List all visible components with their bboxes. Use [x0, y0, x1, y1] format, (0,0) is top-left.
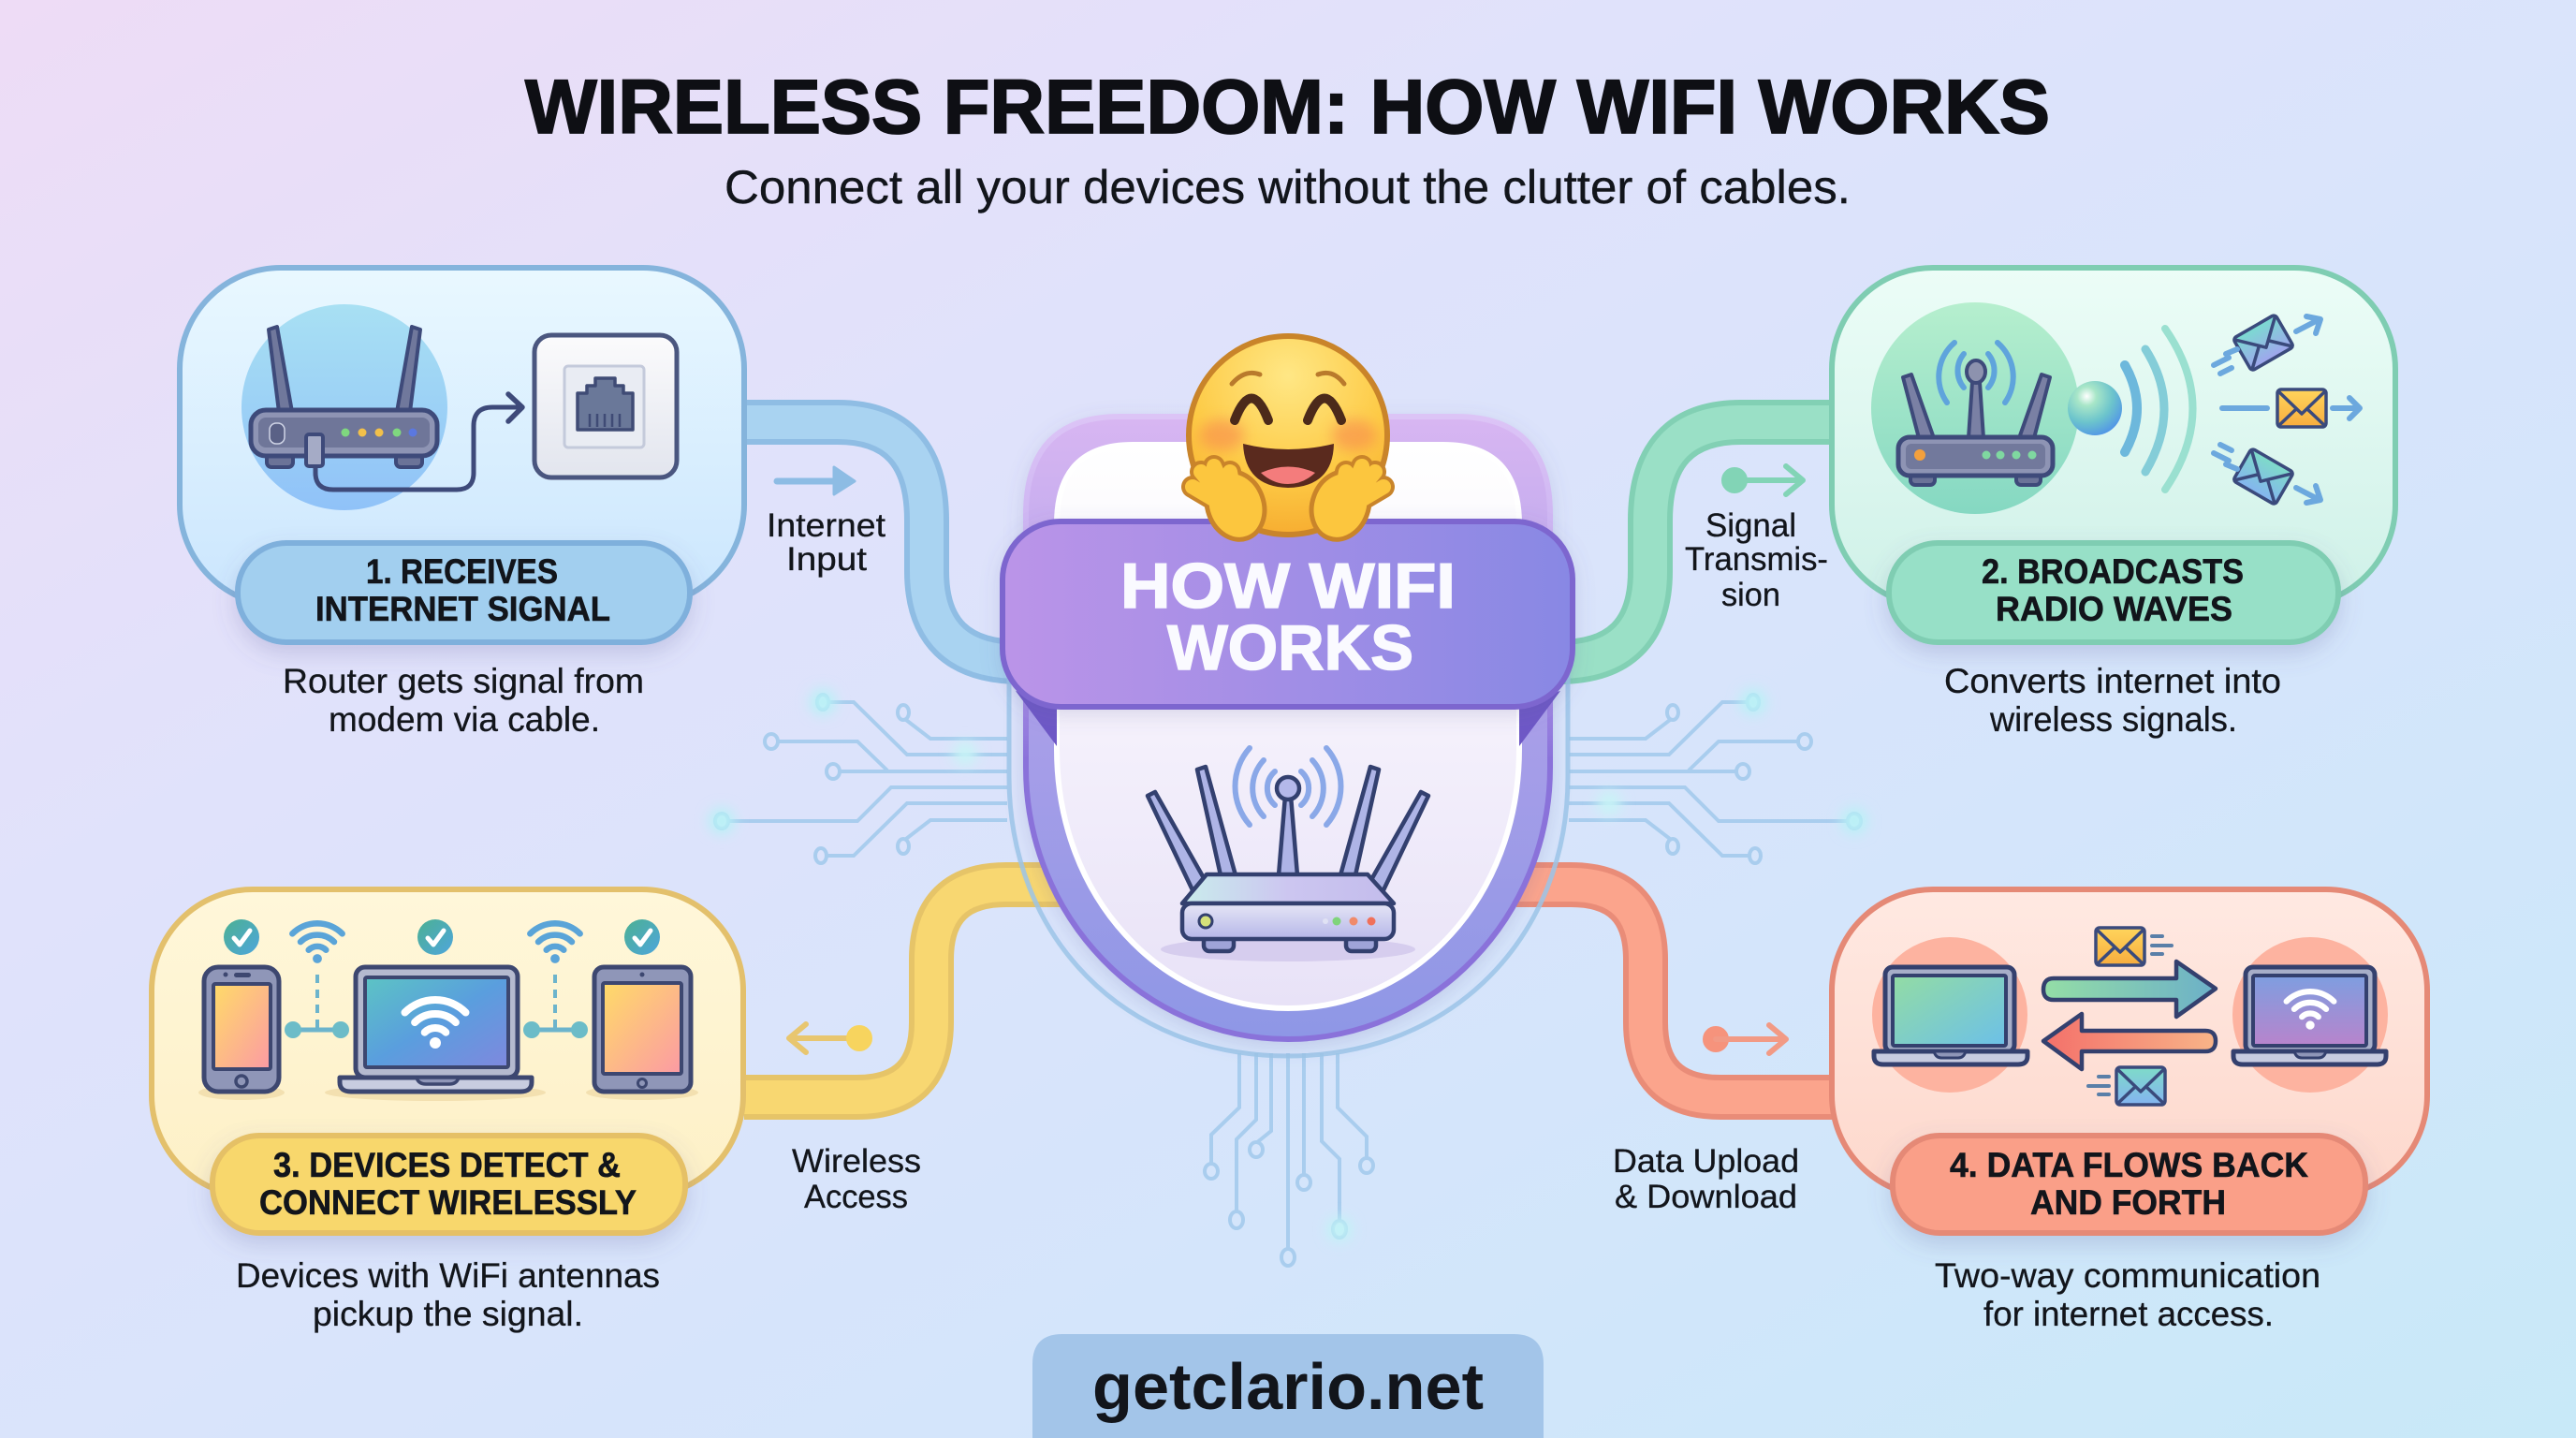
- label: data upload and download: [1613, 1143, 1799, 1215]
- panel 1 title text: 1. RECEIVES: [366, 552, 558, 591]
- icon: glowing signal ball: [2068, 381, 2122, 435]
- icon: laptop with wifi: [340, 967, 532, 1092]
- panel 2 description: Converts internet into: [1944, 662, 2281, 700]
- panel 2 card: [1832, 268, 2395, 606]
- central shield: [1026, 417, 1550, 1039]
- panel 4 title text: [1950, 1146, 2308, 1222]
- label: internet input: Internet: [767, 507, 886, 544]
- label: signal transmission: sion: [1721, 577, 1780, 613]
- label: wireless access: [792, 1143, 921, 1215]
- banner heading: HOW WIFI: [1120, 550, 1456, 622]
- label: data upload and download: & Download: [1615, 1179, 1797, 1215]
- icon: check marks: [224, 919, 660, 955]
- icon: signal circle: [242, 304, 447, 510]
- panel 3 title text: 3. DEVICES DETECT &: [273, 1146, 621, 1184]
- icon: tablet: [594, 967, 691, 1092]
- panel 1: receives internet signal: [180, 268, 744, 739]
- panel 1 card: [180, 268, 744, 606]
- circuit traces: right: [1569, 689, 1867, 863]
- connector: wireless access: [744, 885, 1062, 1097]
- shield inner white area: [1057, 445, 1519, 1008]
- panel 1 title pill: [238, 543, 690, 642]
- panel 3 description: pickup the signal.: [313, 1295, 583, 1333]
- panel 4 card: [1832, 889, 2427, 1196]
- panel 3 title text: [259, 1146, 637, 1222]
- panel 2 title text: 2. BROADCASTS: [1982, 552, 2244, 591]
- icon: router with signal arcs: [1898, 343, 2053, 485]
- footer website text: getclario.net: [1092, 1350, 1484, 1423]
- panel 1 description: Router gets signal from: [283, 662, 644, 700]
- panel 4 title text: 4. DATA FLOWS BACK: [1950, 1146, 2308, 1184]
- icon: hugging emoji: [1189, 336, 1387, 548]
- panel 4 description: Two-way communication: [1935, 1256, 2320, 1295]
- arrow: signal transmission: [1724, 466, 1803, 494]
- arrow: wireless access: [789, 1024, 870, 1052]
- icon: teal envelope: [2088, 1067, 2165, 1105]
- arrow: internet input: [777, 467, 855, 494]
- icon: router with cable: [251, 327, 522, 490]
- arrow: data upload and download: [1705, 1025, 1786, 1053]
- connector: internet input: [744, 422, 1020, 662]
- label: internet input: Input: [786, 541, 867, 578]
- banner heading: WORKS: [1167, 612, 1413, 683]
- label: signal transmission: Signal: [1705, 507, 1796, 544]
- footer tab: [1032, 1334, 1544, 1438]
- device shadows: [198, 1084, 698, 1101]
- icon: download arrow: [2043, 1014, 2216, 1069]
- banner heading: [1120, 550, 1456, 683]
- panel 4: data flows back and forth: [1832, 889, 2427, 1333]
- shield outer body: [1026, 417, 1550, 1039]
- panel 1 description: [283, 662, 644, 739]
- panel 3 description: Devices with WiFi antennas: [236, 1256, 660, 1295]
- connector: data upload and download: [1516, 885, 1832, 1097]
- panel 1 description: modem via cable.: [329, 700, 600, 739]
- icon: wifi links: [285, 923, 588, 1038]
- label: wireless access: Access: [804, 1179, 908, 1215]
- icon: radio wave arcs: [2125, 329, 2192, 490]
- icon: right laptop with wifi: [2233, 967, 2386, 1064]
- circuit traces: bottom: [1205, 1053, 1373, 1266]
- panel 3 title pill: [212, 1136, 685, 1233]
- panel 2 description: [1944, 662, 2281, 739]
- panel 2 title pill: [1889, 543, 2338, 642]
- banner ribbon folds: [1016, 691, 1560, 746]
- central router shadow: [1161, 937, 1415, 961]
- label: signal transmission: [1685, 507, 1828, 613]
- central router icon: [1148, 748, 1428, 951]
- panel 1 title text: [315, 552, 610, 628]
- panel 3 description: [236, 1256, 660, 1333]
- title: WIRELESS FREEDOM: HOW WIFI WORKS: [525, 65, 2050, 150]
- icon: highlight circles: [1872, 937, 2388, 1093]
- label: wireless access: Wireless: [792, 1143, 921, 1180]
- circuit traces: left: [709, 689, 1007, 863]
- icon: upload arrow: [2043, 961, 2216, 1017]
- panel 3: devices detect and connect: [152, 889, 743, 1333]
- label: internet input: [767, 507, 886, 578]
- panel 2 title text: [1982, 552, 2244, 628]
- panel 3 card: [152, 889, 743, 1196]
- panel 4 title text: AND FORTH: [2030, 1183, 2226, 1222]
- icon: signal circle: [1871, 302, 2079, 514]
- icon: flying envelopes and arrows: [2214, 315, 2360, 505]
- icon: left laptop: [1874, 967, 2027, 1064]
- central banner: [1003, 521, 1573, 707]
- panel 4 description: [1935, 1256, 2320, 1333]
- outer ring: [1009, 637, 1568, 1056]
- panel 4 description: for internet access.: [1983, 1295, 2274, 1333]
- label: data upload and download: Data Upload: [1613, 1143, 1799, 1180]
- panel 2: broadcasts radio waves: [1832, 268, 2395, 739]
- connector: signal transmission: [1559, 422, 1832, 662]
- panel 1 title text: INTERNET SIGNAL: [315, 590, 610, 628]
- label: signal transmission: Transmis-: [1685, 541, 1828, 578]
- panel 3 title text: CONNECT WIRELESSLY: [259, 1183, 637, 1222]
- icon: phone: [204, 967, 279, 1092]
- icon: ethernet wall port: [534, 335, 677, 480]
- panel 4 title pill: [1893, 1136, 2365, 1233]
- subtitle: Connect all your devices without the clutter of cables.: [724, 161, 1851, 213]
- panel 2 description: wireless signals.: [1989, 700, 2237, 739]
- icon: yellow envelope: [2096, 928, 2172, 965]
- panel 2 title text: RADIO WAVES: [1996, 590, 2232, 628]
